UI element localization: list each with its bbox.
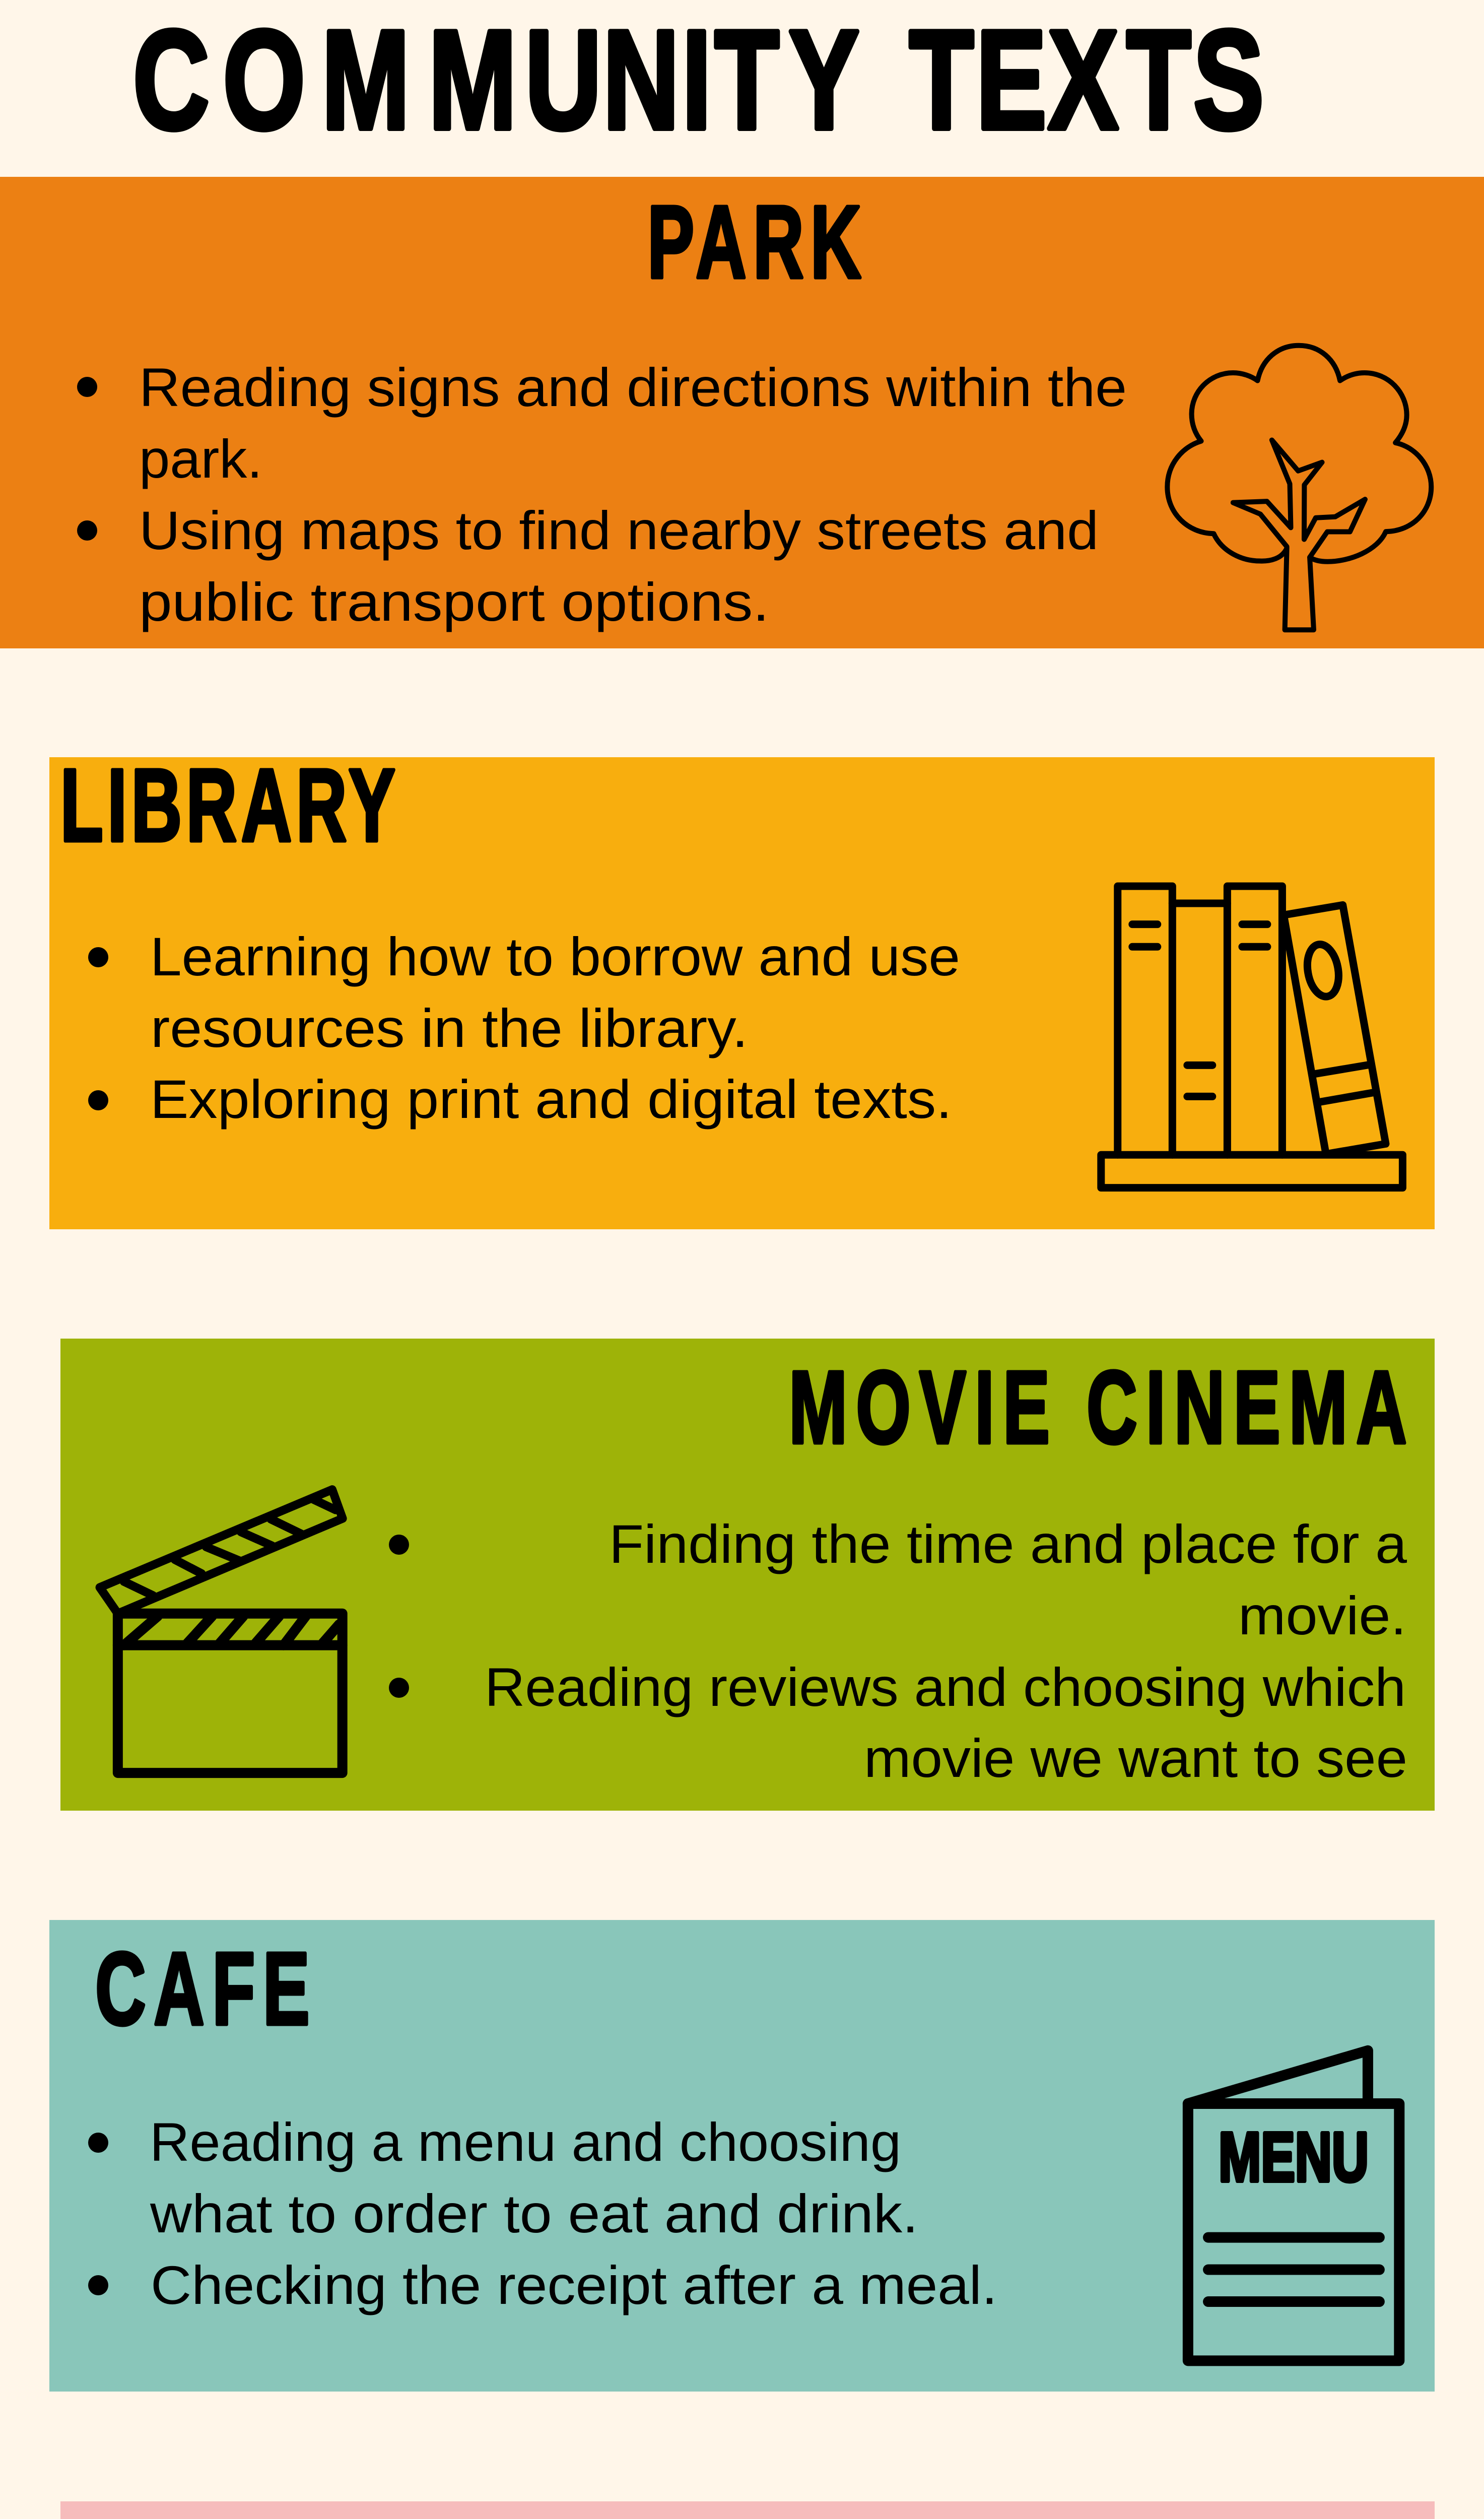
icon: menu [1188,2050,1399,2361]
bullet list: library: Exploring print and digital texts. [150,1069,952,1130]
bullet list: cafe: what to order to eat and drink. [150,2183,918,2244]
icon: clapperboard [100,1490,343,1773]
icon: menu: MENU [1219,2118,1369,2196]
panel: movie cinema [60,1339,1435,1811]
bullet list: park: Reading signs and directions within the [139,357,1127,418]
bullet list: movie cinema: movie we want to see [864,1728,1407,1788]
panel: library [49,748,1435,1229]
bullet list: park [77,357,1127,632]
bullet list: movie cinema: Finding the time and place for a [609,1513,1407,1574]
panel: cafe [49,1920,1435,2392]
icon: tree [1167,346,1431,630]
icon: books on shelf [1101,886,1402,1188]
bullet list: park: Using maps to find nearby streets and [139,500,1099,561]
bullet list: library [88,926,960,1130]
bullet list: park: public transport options. [139,571,769,632]
heading: park: PARK [647,184,861,300]
title: COMMUNITY TEXTS [133,2,1264,159]
heading: movie cinema: MOVIE CINEMA [789,1350,1407,1465]
bullet list: library: resources in the library. [151,998,748,1058]
heading: cafe: CAFE [95,1931,310,2046]
bullet list: library: Learning how to borrow and use [150,926,960,987]
bullet list: cafe: Reading a menu and choosing [150,2111,901,2172]
bullet list: movie cinema: Reading reviews and choosing which [485,1656,1406,1717]
bullet list: cafe: Checking the receipt after a meal. [151,2255,997,2315]
bullet list: movie cinema [389,1513,1407,1788]
panel: beach [60,2501,1435,2519]
bullet list: movie cinema: movie. [1238,1585,1406,1646]
bullet list: park: park. [139,428,262,489]
bullet list: cafe [88,2111,997,2315]
heading: library: LIBRARY [60,748,395,863]
panel: park [0,177,1484,648]
